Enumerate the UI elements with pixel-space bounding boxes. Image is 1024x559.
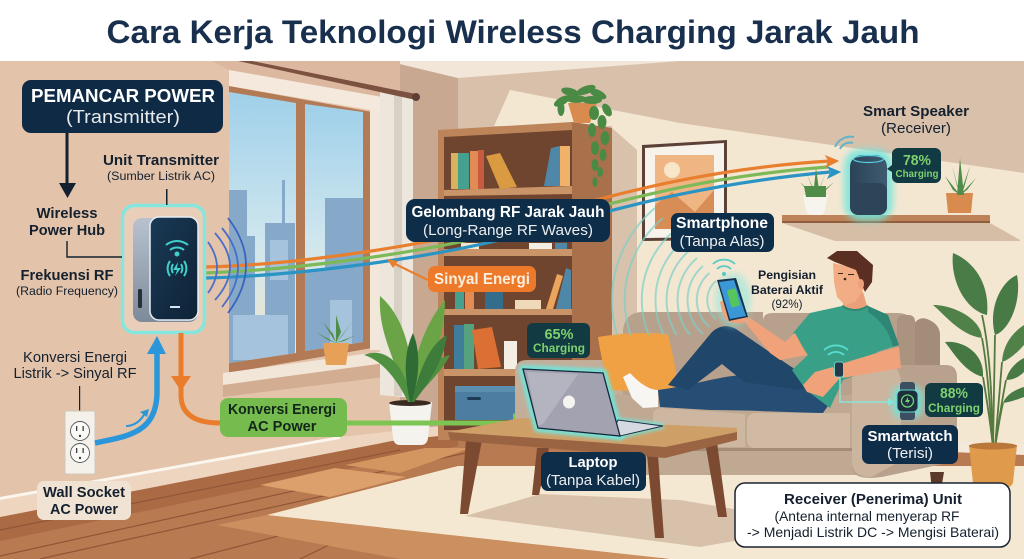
label: smartwatch: [862, 425, 958, 464]
sun patches on floor: [260, 468, 406, 497]
callout: receiver unit: (Antena internal menyerap RF: [774, 508, 960, 524]
plant on bookshelf: [552, 83, 614, 187]
books row 2: [461, 243, 567, 249]
books row 3: [455, 268, 571, 309]
heading box: transmitter: [22, 80, 223, 133]
label: AC power conversion: AC Power: [248, 419, 317, 435]
label: unit transmitter: [103, 153, 219, 205]
label: energy signal with arrow: Sinyal Energi: [434, 271, 530, 288]
torso: [792, 306, 899, 408]
title: Cara Kerja Teknologi Wireless Charging Jarak Jauh: [106, 14, 920, 50]
label: wall socket: [37, 481, 131, 520]
laptop: [523, 369, 663, 436]
shelf plant white pot: [800, 168, 834, 215]
coffee table: [448, 418, 737, 538]
hub radio arcs: [208, 218, 246, 313]
callout: receiver unit: Receiver (Penerima) Unit: [784, 492, 962, 508]
label: smart speaker: (Receiver): [881, 121, 951, 137]
chip: speaker 78%: [887, 148, 941, 183]
books row 4: [454, 324, 517, 369]
heading box: transmitter: (Transmitter): [66, 106, 180, 127]
label: energy conversion to RF: Konversi Energi: [23, 350, 127, 366]
phone wave arcs: [611, 207, 716, 335]
label: unit transmitter: (Sumber Listrik AC): [107, 169, 215, 183]
label: smartphone: [671, 213, 774, 252]
wifi: [713, 260, 735, 275]
label: wireless power hub: Wireless: [36, 206, 98, 222]
chip: watch 88%: 88%: [940, 386, 968, 402]
label: smartwatch: (Terisi): [887, 446, 933, 462]
green power arrow: [347, 413, 530, 433]
rug: [267, 466, 1024, 559]
wifi icon: [835, 137, 854, 149]
callout: receiver unit: [735, 483, 1010, 547]
glow: [122, 206, 204, 332]
chip: watch 88%: [925, 383, 983, 417]
orange output arrow: [171, 333, 220, 423]
label: wireless power hub: [29, 206, 122, 257]
arrow: transmitter to hub label: [59, 133, 76, 198]
forearm near watch: [834, 347, 901, 378]
label: RF frequency: (Radio Frequency): [16, 284, 118, 298]
label: active battery charging: (92%): [772, 298, 803, 311]
label: wall socket: Wall Socket: [43, 485, 125, 501]
label: AC power conversion: [220, 398, 347, 437]
RF long-range waves: [205, 156, 840, 278]
neck: [843, 292, 867, 311]
forearm holding phone: [743, 318, 807, 360]
books row 1: [451, 146, 570, 189]
raised leg: [668, 326, 815, 390]
hair: [827, 251, 873, 292]
label: long-range RF waves: Gelombang RF Jarak Jauh: [412, 204, 604, 221]
transmitter hub: [122, 206, 204, 332]
label: laptop: (Tanpa Kabel): [546, 473, 640, 489]
person: [623, 251, 901, 413]
label: long-range RF waves: [406, 199, 610, 242]
bookshelf: [438, 122, 612, 440]
label: energy conversion to RF: [14, 350, 137, 412]
smartwatch on wrist: [824, 345, 895, 406]
sock: [623, 373, 658, 408]
city skyline: [229, 180, 363, 364]
orange cushion: [598, 333, 678, 391]
label: RF frequency: [16, 268, 118, 298]
shelf plant orange pot: [945, 158, 976, 213]
label: unit transmitter: Unit Transmitter: [103, 153, 219, 169]
chip: laptop 65%: Charging: [533, 341, 585, 355]
smart speaker: [835, 137, 893, 221]
smartphone: [713, 260, 751, 327]
label: smart speaker: Smart Speaker: [863, 104, 969, 120]
label: laptop: Laptop: [568, 455, 618, 471]
label: wireless power hub: Power Hub: [29, 223, 105, 239]
wall socket: [65, 411, 95, 474]
head: [833, 263, 865, 305]
storage box: [455, 386, 517, 420]
chip: laptop 65%: [527, 323, 590, 358]
right floor plant: [933, 253, 1024, 488]
lower leg: [658, 375, 830, 413]
face: [838, 273, 854, 280]
window: [212, 61, 400, 397]
chip: watch 88%: Charging: [928, 401, 980, 415]
label: smartphone: (Tanpa Alas): [680, 234, 765, 250]
chip: speaker 78%: 78%: [903, 153, 931, 169]
label: long-range RF waves: (Long-Range RF Waves): [423, 222, 593, 239]
heading box: transmitter: PEMANCAR POWER: [31, 85, 215, 106]
label: active battery charging: Baterai Aktif: [751, 283, 824, 297]
label: laptop: [541, 452, 646, 491]
sill plant: [316, 315, 356, 365]
big smartwatch icon: [892, 382, 923, 420]
label: AC power conversion: Konversi Energi: [228, 402, 336, 418]
floor: [0, 424, 1024, 559]
curtain: [238, 61, 420, 398]
floor plant white pot: [364, 296, 450, 445]
sofa: [515, 312, 957, 490]
blue power arrow: [95, 336, 166, 443]
chip: laptop 65%: 65%: [544, 327, 574, 343]
label: smartphone: Smartphone: [676, 215, 768, 232]
wifi icon: [166, 241, 188, 276]
label: smartwatch: Smartwatch: [868, 428, 952, 445]
picture frame: [642, 140, 727, 241]
callout: receiver unit: -> Menjadi Listrik DC -> Mengisi Baterai): [747, 524, 999, 540]
label: wall socket: AC Power: [50, 502, 118, 518]
chip: speaker 78%: Charging: [896, 169, 938, 180]
label: active battery charging: [751, 268, 824, 311]
wall shelf: [782, 215, 990, 223]
label: energy conversion to RF: Listrik -> Sinyal RF: [14, 366, 137, 382]
label: active battery charging: Pengisian: [758, 268, 816, 282]
label: smart speaker: [863, 104, 969, 137]
label: RF frequency: Frekuensi RF: [20, 268, 114, 284]
label: energy signal with arrow: [387, 259, 536, 292]
